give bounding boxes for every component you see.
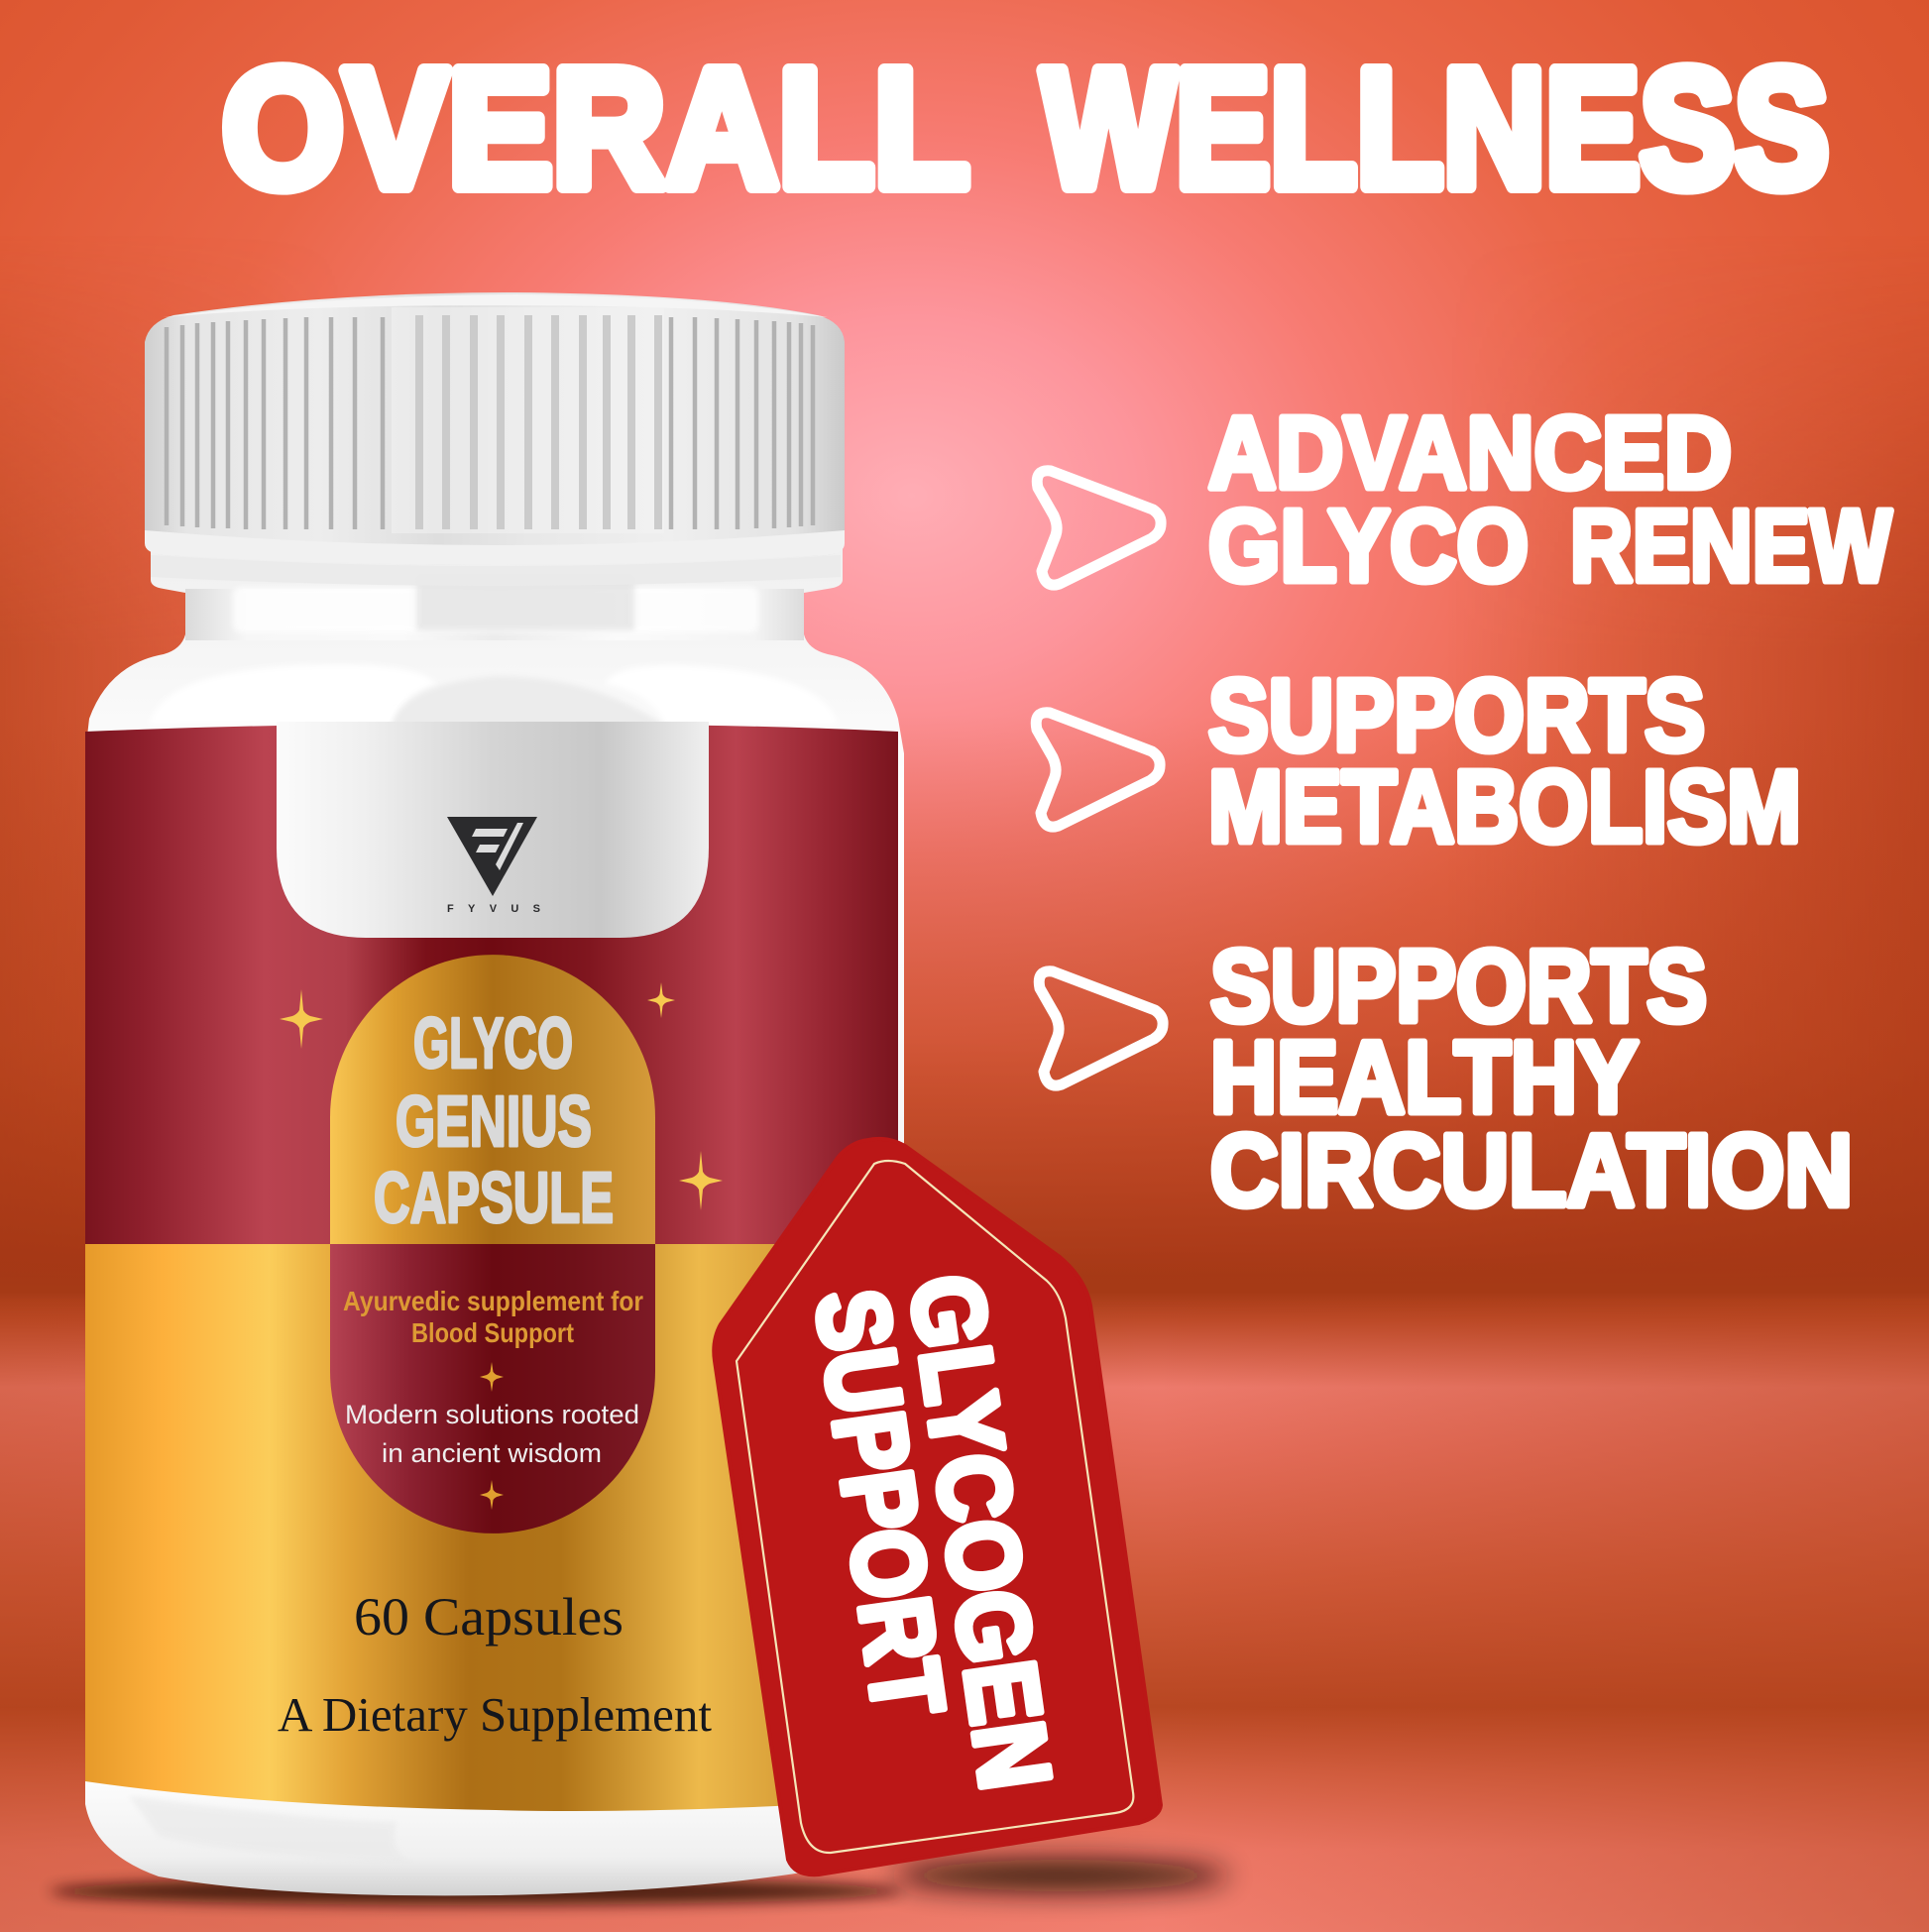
cap lip (151, 555, 841, 586)
dietary supplement line: A Dietary Supplement (278, 1687, 712, 1742)
red label band (85, 725, 898, 1245)
benefit 1 (1037, 396, 1892, 603)
brand logo (447, 817, 540, 915)
product name: GLYCO (413, 1004, 573, 1083)
gold label band (85, 1244, 852, 1811)
icon: arrow 3 (1039, 971, 1163, 1085)
text: supports healthy circulation (1210, 929, 1853, 1227)
tagline: Modern solutions rooted (345, 1400, 639, 1429)
capsule panel red bottom (330, 1244, 655, 1534)
base highlight (129, 1796, 416, 1864)
text: advanced glyco renew: ADVANCED (1208, 396, 1732, 510)
title: OVERALL (222, 35, 969, 223)
background wall (0, 0, 1929, 1299)
sparkles on label (280, 982, 723, 1210)
subtitle: Ayurvedic supplement for (343, 1286, 643, 1316)
tagline: in ancient wisdom (382, 1438, 602, 1468)
text: supports healthy circulation: SUPPORTS (1210, 929, 1707, 1043)
text: advanced glyco renew: GLYCO (1208, 489, 1529, 603)
supplement bottle (85, 292, 904, 1895)
product name: GENIUS (396, 1082, 592, 1162)
text: supports metabolism: METABOLISM (1208, 749, 1801, 863)
subtitle: Blood Support (411, 1317, 574, 1348)
title (222, 35, 1829, 223)
ground shadow (50, 1860, 1229, 1905)
product name: CAPSULE (374, 1159, 614, 1238)
capsule count: 60 Capsules (354, 1587, 624, 1647)
text: supports metabolism (1208, 658, 1801, 863)
tag text: GLYCOGEN (888, 1268, 1073, 1796)
bottle neck and shoulders (85, 543, 904, 1289)
label notch (277, 722, 709, 938)
small sparkles (480, 1362, 504, 1510)
icon: arrow 2 (1036, 713, 1160, 827)
tagline (345, 1400, 639, 1468)
tag text (794, 1268, 1073, 1796)
text: advanced glyco renew (1208, 396, 1892, 603)
text: supports metabolism: SUPPORTS (1208, 658, 1705, 772)
tag: glycogen support (714, 1139, 1161, 1875)
product name (374, 1004, 614, 1238)
text: supports healthy circulation: CIRCULATION (1210, 1113, 1853, 1227)
capsule panel gold top (330, 955, 655, 1245)
background floor (0, 1251, 1929, 1932)
benefit 3 (1039, 929, 1853, 1227)
subtitle (343, 1286, 643, 1348)
tag text: SUPPORT (794, 1283, 965, 1723)
brand logo: FYVUS (447, 903, 540, 915)
text: supports healthy circulation: HEALTHY (1210, 1020, 1639, 1134)
bottle base (85, 1764, 852, 1895)
tag body (714, 1139, 1161, 1875)
benefit 2 (1036, 658, 1801, 863)
tag stitched border (737, 1161, 1133, 1853)
bottle cap (145, 292, 845, 565)
icon: arrow 1 (1037, 471, 1161, 585)
